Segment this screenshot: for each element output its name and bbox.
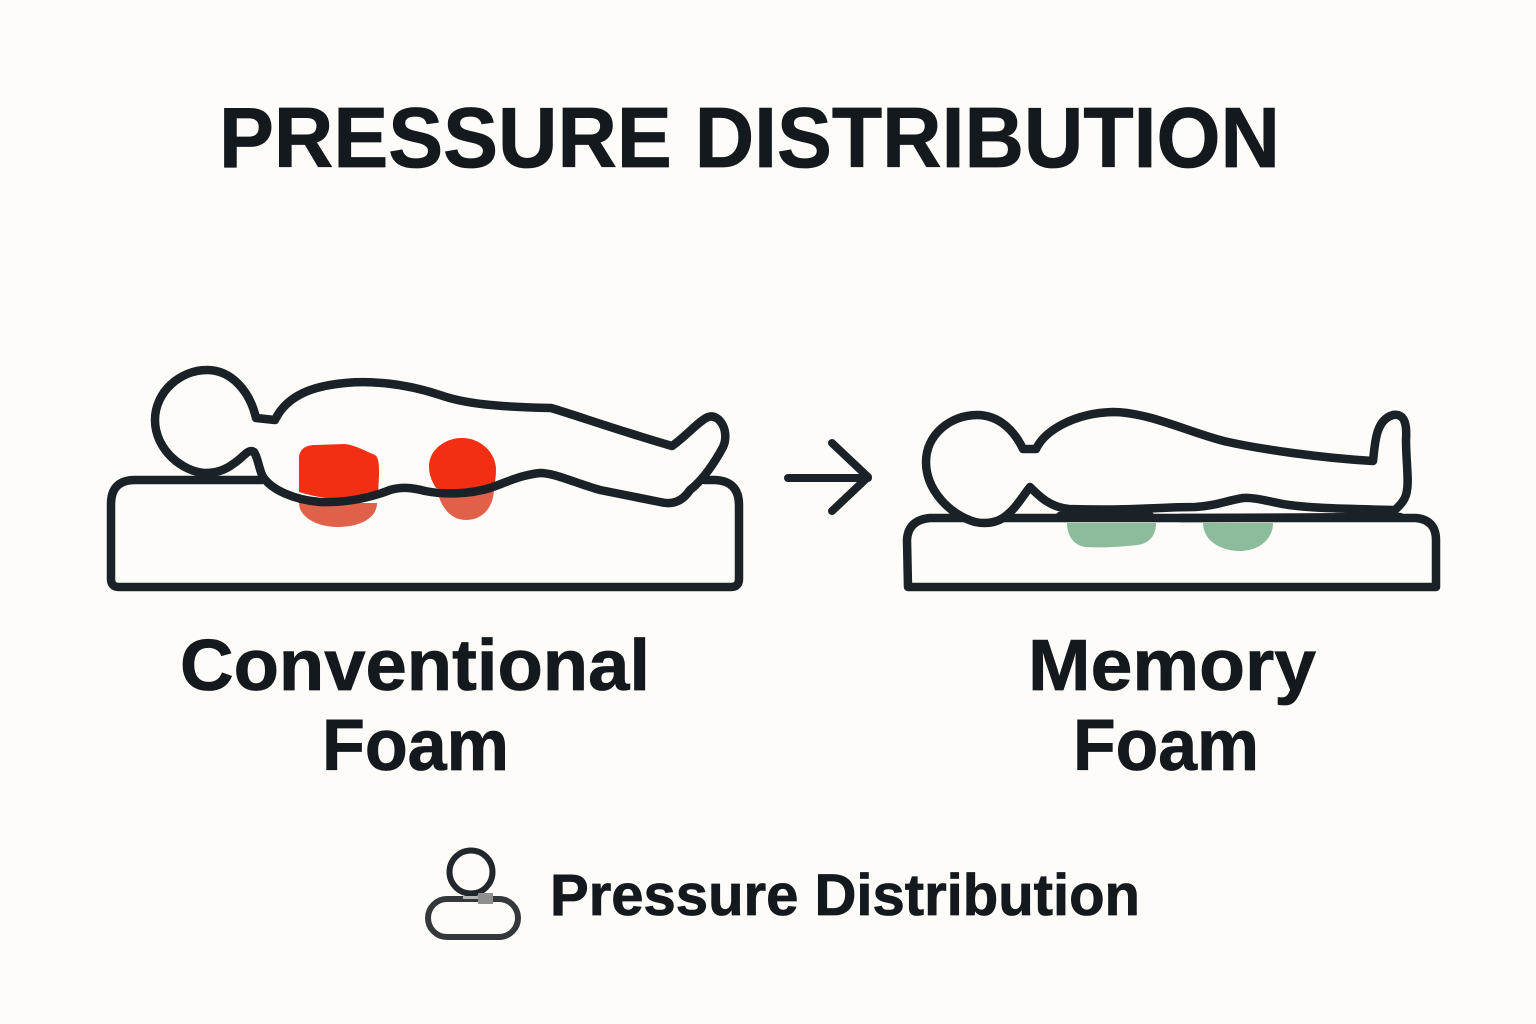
mattress top edge under body [1060, 516, 1400, 518]
label: memory foam: Foam [1073, 706, 1259, 786]
legend label: Pressure Distribution [550, 863, 1140, 928]
label: conventional foam [180, 626, 650, 786]
label: conventional foam: Conventional [180, 626, 650, 706]
body outline on conventional foam [155, 370, 725, 503]
panel: conventional foam illustration [111, 370, 739, 587]
green pressure zone at hips [1067, 523, 1156, 547]
red pressure zone at legs [429, 438, 496, 491]
red pressure zone below hips [299, 503, 377, 527]
panel: memory foam illustration [907, 412, 1436, 587]
body outline on memory foam [926, 412, 1408, 523]
label: conventional foam: Foam [322, 706, 509, 786]
red pressure zone at hips [299, 444, 379, 499]
red pressure zone below legs [437, 488, 494, 520]
arrow [788, 443, 868, 511]
memory foam mattress [907, 518, 1436, 587]
label: memory foam [1028, 626, 1316, 786]
label: memory foam: Memory [1028, 626, 1316, 706]
conventional foam mattress [111, 480, 739, 587]
icon: person on mattress legend [428, 850, 518, 937]
green pressure zone at legs [1203, 523, 1273, 551]
title: PRESSURE DISTRIBUTION [219, 91, 1280, 186]
